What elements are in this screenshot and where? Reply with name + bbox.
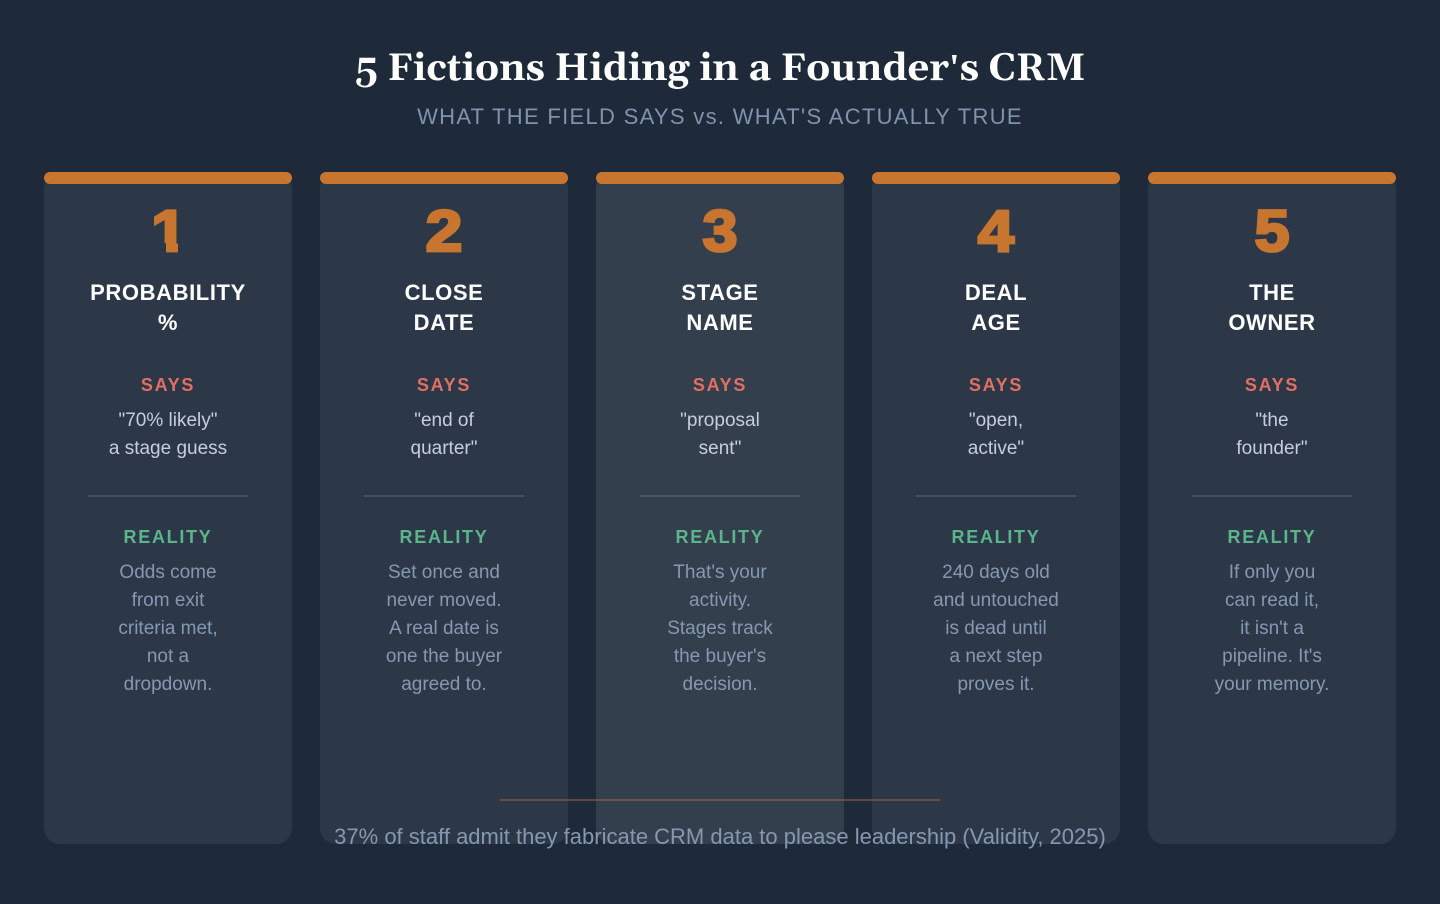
reality text 4: a next step: [950, 646, 1042, 667]
says text 2: "end of: [414, 410, 474, 431]
reality text 1: not a: [147, 646, 190, 667]
reality text 5: pipeline. It's: [1222, 646, 1322, 667]
number 4: 4: [978, 199, 1014, 264]
heading 5: THE: [1249, 280, 1295, 305]
reality text 2: A real date is: [389, 618, 499, 639]
says text 5: founder": [1236, 438, 1308, 459]
says text 3: "proposal: [680, 410, 760, 431]
panel: stage name: [596, 172, 844, 844]
number 2: 2: [426, 200, 462, 264]
says label 1: SAYS: [141, 375, 195, 395]
accent bar 4: [872, 172, 1120, 184]
reality label 4: REALITY: [952, 527, 1040, 547]
reality text 5: If only you: [1229, 562, 1315, 583]
number 1: 1: [151, 199, 187, 263]
panel: probability: [44, 172, 292, 844]
says text 4: active": [968, 438, 1024, 459]
heading 3: NAME: [686, 310, 754, 335]
accent bar 1: [44, 172, 292, 184]
accent bar 2: [320, 172, 568, 184]
reality text 2: agreed to.: [401, 674, 487, 695]
reality text 2: one the buyer: [386, 646, 503, 667]
panel: close date: [320, 172, 568, 844]
reality text 5: your memory.: [1215, 674, 1329, 695]
reality text 5: it isn't a: [1240, 618, 1304, 639]
reality text 3: decision.: [682, 674, 758, 695]
reality text 3: activity.: [689, 590, 751, 611]
footer note: 37% of staff admit they fabricate CRM data to please leadership (Validity, 2025): [334, 824, 1106, 849]
subtitle: WHAT THE FIELD SAYS vs. WHAT'S ACTUALLY TRUE: [417, 104, 1023, 129]
reality text 2: Set once and: [388, 562, 500, 583]
accent bar 5: [1148, 172, 1396, 184]
reality text 1: from exit: [132, 590, 205, 611]
reality label 2: REALITY: [400, 527, 488, 547]
says label 5: SAYS: [1245, 375, 1299, 395]
panel: deal age: [872, 172, 1120, 844]
reality label 1: REALITY: [124, 527, 212, 547]
reality label 3: REALITY: [676, 527, 764, 547]
says text 1: a stage guess: [109, 438, 227, 459]
reality text 1: criteria met,: [118, 618, 218, 639]
heading 1: PROBABILITY: [90, 280, 246, 305]
footer rule: [500, 799, 940, 801]
heading 3: STAGE: [681, 280, 759, 305]
panel: the owner: [1148, 172, 1396, 844]
reality text 1: Odds come: [119, 562, 217, 583]
reality text 5: can read it,: [1225, 590, 1319, 611]
heading 1: %: [158, 310, 178, 335]
says text 1: "70% likely": [118, 410, 218, 431]
heading 2: CLOSE: [405, 280, 483, 305]
reality text 4: and untouched: [933, 590, 1059, 611]
reality text 3: That's your: [673, 562, 767, 583]
heading 2: DATE: [414, 310, 474, 335]
says text 3: sent": [699, 438, 741, 459]
heading 4: DEAL: [965, 280, 1027, 305]
accent bar 3: [596, 172, 844, 184]
number 3: 3: [703, 198, 737, 263]
says label 3: SAYS: [693, 375, 747, 395]
reality text 1: dropdown.: [124, 674, 212, 695]
says label 4: SAYS: [969, 375, 1023, 395]
reality text 4: proves it.: [957, 674, 1035, 695]
reality label 5: REALITY: [1228, 527, 1316, 547]
reality text 4: 240 days old: [942, 562, 1050, 583]
reality text 3: the buyer's: [674, 646, 766, 667]
says text 2: quarter": [411, 438, 477, 459]
says text 4: "open,: [969, 410, 1023, 431]
heading 5: OWNER: [1228, 310, 1316, 335]
reality text 3: Stages track: [667, 618, 773, 639]
says label 2: SAYS: [417, 375, 471, 395]
reality text 4: is dead until: [945, 618, 1047, 639]
number 5: 5: [1255, 198, 1289, 263]
heading 4: AGE: [971, 310, 1021, 335]
title: 5 Fictions Hiding in a Founder's CRM: [355, 45, 1085, 93]
reality text 2: never moved.: [386, 590, 502, 611]
says text 5: "the: [1255, 410, 1289, 431]
